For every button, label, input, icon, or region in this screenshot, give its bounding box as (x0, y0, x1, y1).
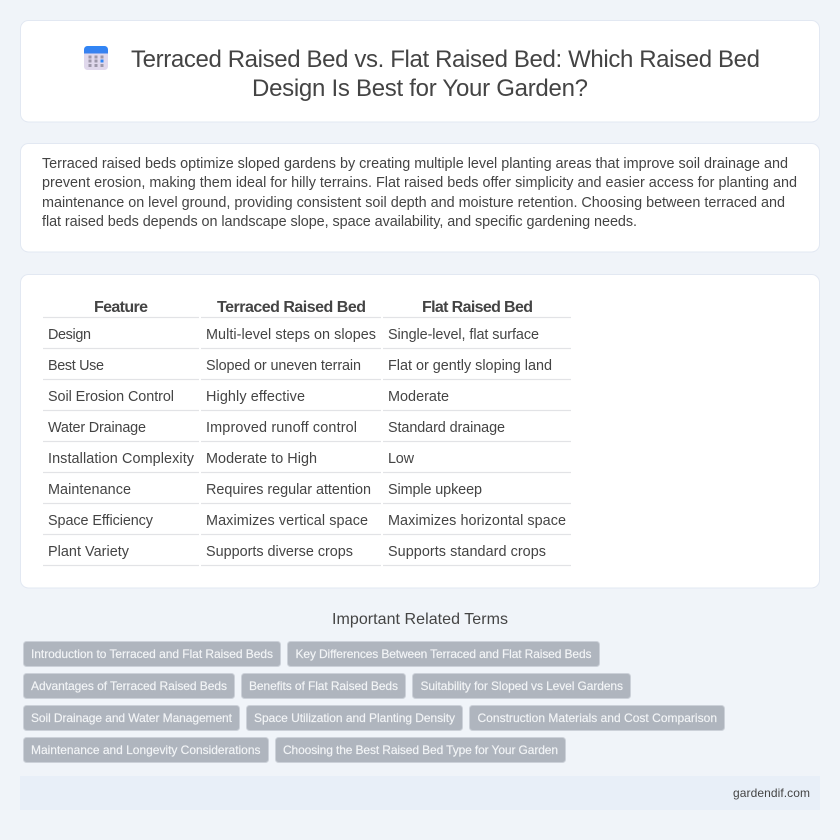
table header (94, 299, 533, 316)
row: plant variety: Plant Variety (48, 544, 130, 560)
row: maintenance (48, 482, 482, 498)
panel: introduction text (20, 144, 820, 252)
row: design (48, 327, 539, 343)
row: soil erosion control: Moderate (388, 389, 449, 405)
row: space efficiency: Space Efficiency (48, 513, 154, 529)
row: installation complexity: Moderate to High (206, 451, 317, 467)
panel: introduction text: Terraced raised beds optimize sloped gardens by creating multiple level planting areas that improve soil drainage and (42, 156, 788, 172)
tag (276, 738, 566, 762)
tag (288, 642, 600, 666)
panel: introduction text: flat raised beds depends on landscape slope, space availability, and specific gardening needs. (42, 214, 637, 230)
tag (470, 706, 724, 730)
title: Design Is Best for Your Garden? (252, 75, 588, 102)
row: water drainage: Standard drainage (388, 420, 505, 436)
row: plant variety (48, 544, 546, 560)
tag: Key Differences Between Terraced and Flat Raised Beds (296, 647, 592, 661)
panel: header (20, 20, 820, 122)
panel: related term tags (24, 642, 724, 762)
row: design: Multi-level steps on slopes (206, 327, 376, 343)
title: Terraced Raised Bed vs. Flat Raised Bed: Which Raised Bed (131, 46, 760, 73)
table header: Terraced Raised Bed (217, 299, 366, 316)
tag: Suitability for Sloped vs Level Gardens (420, 679, 623, 693)
tag: Space Utilization and Planting Density (254, 711, 455, 725)
row: best use: Best Use (48, 358, 104, 374)
row: maintenance: Requires regular attention (206, 482, 371, 498)
row: installation complexity (48, 451, 415, 467)
row: best use (48, 358, 552, 374)
row: installation complexity: Installation Complexity (48, 451, 195, 467)
row: best use: Flat or gently sloping land (388, 358, 552, 374)
tag: Introduction to Terraced and Flat Raised Beds (31, 647, 273, 661)
tag (24, 738, 268, 762)
icon: calendar (84, 46, 108, 70)
row: maintenance: Maintenance (48, 482, 131, 498)
panel: comparison table (20, 274, 820, 588)
row: space efficiency: Maximizes vertical space (206, 513, 368, 529)
tag: Soil Drainage and Water Management (31, 711, 233, 725)
tag: Choosing the Best Raised Bed Type for Your Garden (283, 743, 558, 757)
tag: Maintenance and Longevity Considerations (31, 743, 260, 757)
panel: introduction text: maintenance on level ground, providing consistent soil depth and moisture retention. Choosing between terraced and (42, 195, 785, 211)
footer (20, 776, 820, 810)
tag: Construction Materials and Cost Comparison (478, 711, 717, 725)
row: best use: Sloped or uneven terrain (206, 358, 361, 374)
row: design: Design (48, 327, 91, 343)
heading: important related terms: Important Related Terms (332, 611, 508, 628)
row: soil erosion control: Soil Erosion Control (48, 389, 174, 405)
row: installation complexity: Low (388, 451, 415, 467)
row: soil erosion control: Highly effective (206, 389, 305, 405)
row: space efficiency: Maximizes horizontal space (388, 513, 566, 529)
tag: Benefits of Flat Raised Beds (249, 679, 398, 693)
table header: Feature (94, 299, 148, 316)
row: plant variety: Supports standard crops (388, 544, 546, 560)
tag (246, 706, 462, 730)
row: plant variety: Supports diverse crops (206, 544, 353, 560)
row: design: Single-level, flat surface (388, 327, 539, 343)
panel: introduction text: prevent erosion, making them ideal for hilly terrains. Flat raised beds offer simplicity and easier access for planting and (42, 175, 797, 191)
tag (24, 674, 234, 698)
tag (242, 674, 406, 698)
footer: gardendif.com (733, 786, 810, 800)
row: water drainage: Improved runoff control (206, 420, 357, 436)
table header: Flat Raised Bed (422, 299, 533, 316)
tag: Advantages of Terraced Raised Beds (31, 679, 227, 693)
row: space efficiency (48, 513, 566, 529)
row: water drainage (48, 420, 505, 436)
title (131, 46, 760, 102)
tag (24, 642, 280, 666)
tag (24, 706, 240, 730)
row: soil erosion control (48, 389, 449, 405)
row: water drainage: Water Drainage (48, 420, 146, 436)
row: maintenance: Simple upkeep (388, 482, 482, 498)
tag (412, 674, 630, 698)
